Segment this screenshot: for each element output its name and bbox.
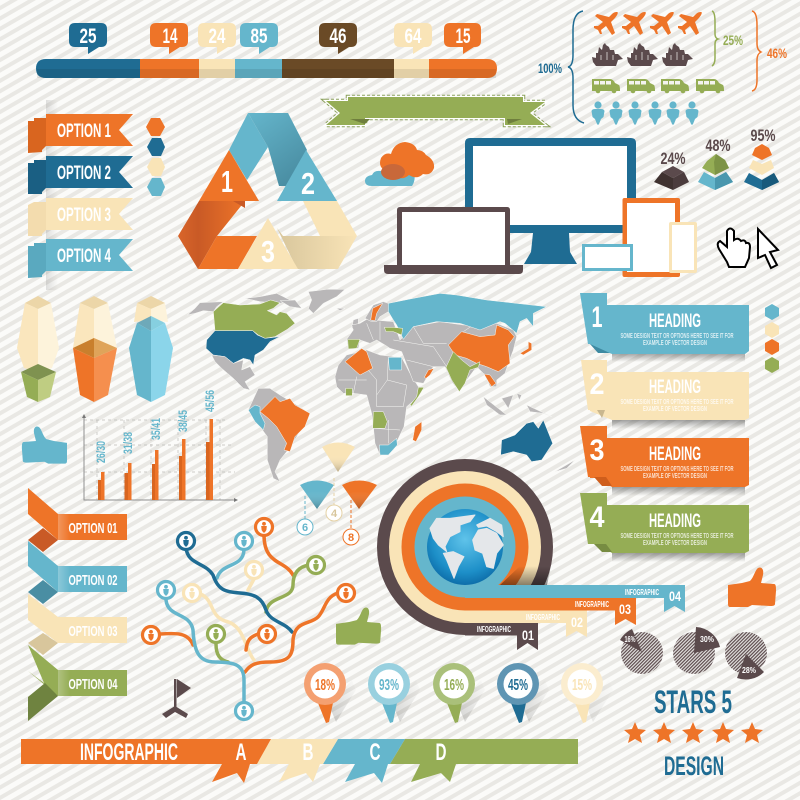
heading panel 1: HEADING	[649, 311, 701, 332]
ribbon 02: 02	[571, 614, 583, 630]
triangle segment 2: 2	[301, 166, 315, 201]
ribbon 03: INFOGRAPHIC	[575, 600, 609, 609]
marker 4: 4	[331, 508, 338, 520]
ribbon 04: INFOGRAPHIC	[625, 588, 659, 597]
map: Canada	[213, 300, 295, 338]
orange bracket and 46 percent: 46%	[767, 45, 787, 61]
map: Africa	[335, 350, 423, 455]
five stars rating	[624, 722, 763, 743]
radar fan cream	[322, 442, 355, 472]
triangle segment 1	[199, 150, 259, 208]
icon: hand cursor	[718, 228, 750, 267]
ribbon segment A and title: INFOGRAPHIC	[80, 739, 178, 766]
3D stack 95 percent	[744, 126, 779, 190]
world map	[187, 289, 575, 482]
3D stack 48 percent	[698, 136, 733, 190]
chevron option 04	[28, 645, 127, 721]
map: Thailand	[484, 374, 496, 387]
node person icons	[148, 522, 349, 716]
top segmented progress bar	[36, 59, 497, 78]
green bracket and 25 percent: 25%	[723, 32, 743, 48]
triangle segment 3: 3	[261, 234, 275, 269]
penrose triangle with numbers 1 2 3	[178, 113, 357, 269]
map: Mexico and Central America	[212, 355, 255, 390]
map: African country borders	[338, 357, 407, 443]
bottom ribbon bar	[21, 739, 578, 783]
3D stack 95 percent: 95%	[750, 126, 776, 145]
map: Scandinavia	[365, 302, 388, 322]
devices group	[384, 138, 697, 277]
ribbon list: option 1 to 4	[28, 100, 133, 290]
map: Southeast Asia islands	[483, 393, 575, 472]
ribbon segment D	[390, 739, 578, 782]
icon: orange thumbs up	[728, 567, 776, 607]
option 3 ribbon: OPTION 3	[57, 204, 111, 226]
option colour hexagons	[146, 118, 165, 196]
marker 4	[326, 478, 342, 521]
map: South Africa	[379, 438, 397, 455]
people row	[592, 101, 698, 125]
ribbon segment A and title: A	[236, 739, 246, 766]
ribbon 04: 04	[669, 588, 681, 604]
3D stack 24 percent: 24%	[660, 149, 686, 168]
map: Algeria	[345, 348, 373, 375]
bar chart: 26/30	[94, 441, 108, 463]
3D pillar cream and blue	[129, 296, 173, 402]
bar chart: 38/45	[176, 410, 190, 432]
ribbon segment C	[323, 739, 405, 783]
map: Brazil	[260, 397, 310, 452]
small landscape tablet	[582, 244, 633, 271]
radar fan blue with marker 6: 6	[302, 522, 308, 534]
heading panel 4	[580, 493, 749, 562]
map pin 18 percent: 18%	[315, 677, 335, 694]
map pin 16 percent: 16%	[444, 677, 464, 694]
map: Peru	[248, 405, 265, 430]
ribbon 02: INFOGRAPHIC	[526, 613, 560, 622]
map: Ivory Coast	[346, 388, 352, 396]
stars 5 title: STARS 5	[654, 684, 732, 720]
heading panel 4: 4	[590, 501, 605, 534]
heading panel 2	[581, 360, 749, 429]
triangle segment 3	[238, 218, 298, 269]
map: Russia	[388, 293, 547, 339]
ships row	[592, 43, 693, 66]
ribbon segment D: D	[436, 739, 446, 766]
heading panel 2: 2	[590, 368, 604, 401]
hatched pie 16 percent	[620, 629, 663, 674]
blue bracket and 100 percent	[538, 11, 584, 123]
green stitched banner	[326, 97, 545, 125]
icon: green thumbs up	[336, 607, 381, 645]
monitor	[465, 138, 636, 264]
icon: arrow cursor	[758, 229, 778, 268]
tablet	[622, 198, 680, 277]
map: Europe and Asia	[347, 319, 517, 392]
option 1 ribbon: OPTION 1	[57, 120, 111, 142]
bubble 14	[150, 23, 188, 54]
ribbon segment A and title	[21, 739, 271, 783]
map pin 45 percent: 45%	[508, 677, 528, 694]
bubble 25	[69, 23, 107, 54]
bar chart: 45/56	[203, 390, 217, 412]
heading colour hexagons	[765, 304, 779, 373]
icon: globe	[427, 509, 503, 585]
option 3 ribbon	[28, 198, 133, 236]
heading panel 2: HEADING	[649, 377, 701, 398]
heading panel 3: EXAMPLE OF VECTOR DESIGN	[643, 473, 707, 480]
phone	[669, 222, 697, 273]
design caption: DESIGN	[664, 751, 724, 781]
spiral ring with globe and numbered ribbons	[377, 459, 685, 650]
bubble 64	[394, 23, 432, 54]
ribbon segment B: B	[302, 739, 314, 766]
ribbon segment B	[257, 739, 338, 782]
map pin 18 percent	[304, 663, 356, 723]
map: Alaska, Greenland, Arctic islands	[187, 289, 358, 328]
heading panel 2: EXAMPLE OF VECTOR DESIGN	[643, 406, 707, 413]
bubble 25: 25	[80, 25, 97, 48]
heading panel 1: EXAMPLE OF VECTOR DESIGN	[643, 340, 707, 347]
bar chart: 35/41	[149, 418, 163, 440]
map: Madagascar	[413, 422, 422, 442]
map: South America	[248, 388, 310, 482]
pictogram transport statistics	[538, 11, 787, 125]
ribbon 01: INFOGRAPHIC	[477, 625, 511, 634]
bubble 64: 64	[404, 25, 422, 48]
planes row	[594, 12, 702, 35]
bubble 46	[319, 23, 357, 54]
map pin 93 percent: 93%	[379, 677, 399, 694]
map pin 16 percent	[433, 663, 485, 723]
3D stack 24 percent	[654, 149, 689, 190]
bubble 14: 14	[162, 25, 178, 48]
map: Australia	[501, 420, 553, 462]
ribbon segment C: C	[370, 739, 380, 766]
network nodes	[142, 518, 354, 720]
chevron option 01	[28, 488, 127, 552]
ribbon 01	[465, 623, 538, 650]
heading panel 1	[580, 293, 749, 362]
bubble 15	[444, 23, 481, 54]
chevron option 03: OPTION 03	[68, 623, 118, 640]
option 4 ribbon	[28, 239, 133, 278]
bubble 24	[198, 23, 236, 54]
map: India	[446, 352, 480, 392]
vans row	[592, 79, 724, 93]
chevron option 02: OPTION 02	[68, 572, 118, 589]
option 2 ribbon	[28, 156, 133, 194]
bar chart	[82, 390, 238, 502]
map: Somalia	[410, 387, 424, 406]
radar fan orange with marker 8: 8	[348, 532, 354, 544]
chevron option 03	[28, 594, 127, 655]
hatched pie 30 percent: 30%	[700, 634, 714, 644]
icon: blue thumbs up	[22, 426, 67, 464]
ribbon 02	[465, 610, 587, 637]
blue bracket and 100 percent: 100%	[538, 60, 562, 76]
map: Angola	[373, 412, 387, 428]
bar chart: 31/38	[121, 432, 135, 454]
green bracket and 25 percent	[712, 11, 743, 66]
map: Japan	[520, 342, 532, 355]
network tree of people	[142, 518, 354, 720]
map pin 93 percent	[368, 663, 420, 723]
chevron option 01: OPTION 01	[68, 520, 118, 537]
3D pillar cream and green	[17, 296, 59, 402]
heading panel 4: HEADING	[649, 511, 701, 532]
ribbon 04	[465, 585, 685, 612]
option 1 ribbon	[28, 114, 133, 153]
ribbon 01: 01	[522, 627, 534, 643]
option 2 ribbon: OPTION 2	[57, 162, 111, 184]
map pin 15 percent: 15%	[572, 677, 592, 694]
bubble 85	[240, 23, 278, 54]
hatched pie 28 percent	[725, 632, 767, 680]
bubble 46: 46	[330, 25, 346, 48]
orange bracket and 46 percent	[752, 11, 787, 91]
map: United States	[206, 331, 280, 365]
heading panel 3: 3	[590, 434, 604, 467]
map: Eurasian country borders	[367, 322, 473, 367]
hatched pie 16 percent: 16%	[624, 634, 636, 644]
heading panel 4: EXAMPLE OF VECTOR DESIGN	[643, 540, 707, 547]
map: Oman	[424, 368, 434, 378]
radar fan blue with marker 6	[297, 480, 334, 535]
bubble 85: 85	[250, 25, 268, 48]
bubble 15: 15	[456, 25, 471, 48]
chevron option 02	[28, 541, 127, 604]
bubble 24: 24	[208, 25, 226, 48]
3D pillar cream and orange	[73, 296, 117, 402]
hatched pie 28 percent: 28%	[742, 665, 756, 675]
triangle segment 2	[277, 150, 337, 201]
heading panel 3	[580, 426, 749, 496]
map: Egypt	[388, 357, 402, 370]
hatched pie 30 percent	[673, 627, 720, 674]
chevron option 04: OPTION 04	[68, 676, 118, 693]
map pin 15 percent	[561, 663, 613, 723]
triangle segment 1: 1	[221, 164, 233, 199]
icon: flag	[162, 679, 191, 718]
ribbon 03	[465, 598, 636, 625]
heading panel 3: HEADING	[649, 444, 701, 465]
map: Sweden	[371, 303, 383, 321]
map: Spain	[348, 339, 360, 349]
3D stack 48 percent: 48%	[706, 136, 730, 155]
map: China	[448, 325, 514, 372]
map: Ukraine	[384, 327, 403, 335]
ribbon 03: 03	[619, 601, 631, 617]
option 4 ribbon: OPTION 4	[57, 245, 111, 267]
radar fan orange with marker 8	[342, 480, 377, 545]
map pin 45 percent	[497, 663, 549, 723]
icon: clouds	[365, 142, 434, 186]
heading panel 1: 1	[592, 301, 602, 334]
laptop	[384, 207, 523, 274]
